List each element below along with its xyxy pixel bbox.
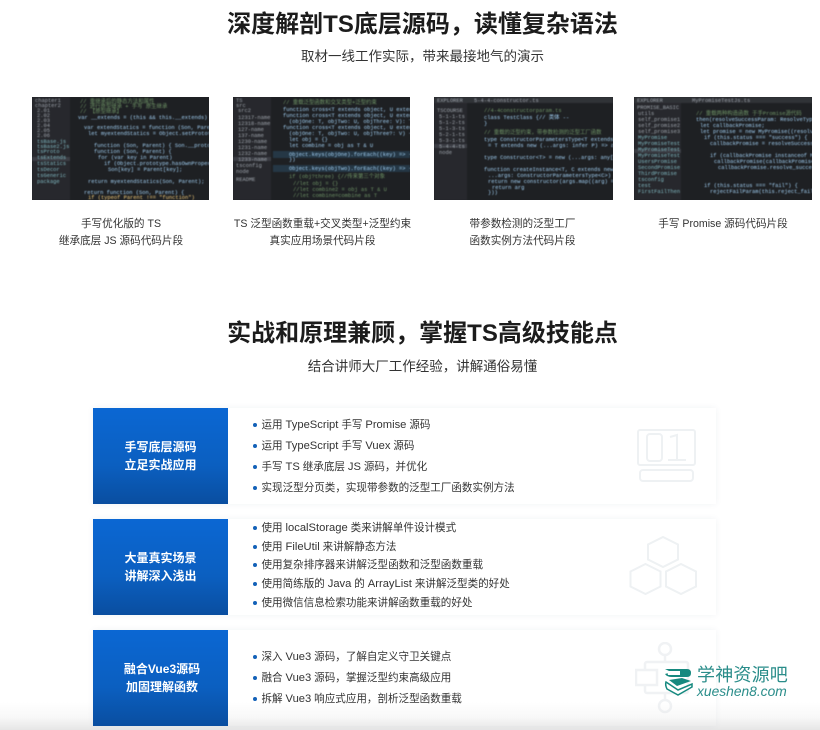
code screenshot 2: TS overload: (objOne: T, objTwo: U, objThree?: V) {	[289, 131, 410, 137]
bullet list: 深入 Vue3 源码，了解自定义守卫关键点	[262, 651, 451, 663]
code screenshot 1: JS extends source: package	[37, 179, 60, 185]
code screenshot 4: Promise source: // 重载两种构造函数 于手Promise源代码	[696, 109, 802, 117]
code screenshot 4: Promise source: tsconfig	[638, 177, 664, 183]
code screenshot 1: JS extends source: tsBase2.js	[37, 144, 69, 150]
code screenshot 2: TS overload: README	[236, 177, 255, 183]
panel: real scenarios	[93, 519, 716, 615]
code screenshot 3: generic factory: 5-1-1-ts	[439, 114, 465, 120]
bullet list: 运用 TypeScript 手写 Promise 源码	[262, 419, 430, 431]
code screenshot 2: TS overload: if (obj?three) {//传来第三个对象	[289, 172, 386, 180]
panel label: 手写底层源码	[124, 440, 196, 454]
code screenshot 4: Promise source: self_promise3	[638, 129, 680, 135]
bullet list: 使用 localStorage 类来讲解单件设计模式	[262, 522, 456, 534]
code screenshot 2: TS overload: src2	[238, 108, 251, 114]
code screenshot 4: Promise source: MyPromiseTest	[638, 153, 680, 159]
caption 2: 真实应用场景代码片段	[270, 234, 375, 246]
code screenshot 1: JS extends source: // 重继承后的静态方法和属性	[80, 97, 155, 105]
code screenshot 4: Promise source: MyPromiseTest	[638, 147, 680, 153]
code screenshot 1: JS extends source: chapter1	[35, 98, 61, 104]
code screenshot 1: JS extends source: function (Son, Parent) {	[94, 149, 172, 155]
code screenshot 1: JS extends source: 2.02	[37, 113, 50, 119]
bullet list: 实现泛型分页类，实现带参数的泛型工厂函数实例方法	[262, 482, 515, 494]
panel label	[93, 408, 228, 504]
bullet list: 运用 TypeScript 手写 Vuex 源码	[262, 440, 414, 452]
code screenshot 2: TS overload: 1230-name	[238, 139, 267, 145]
subtitle: section two: 结合讲师大厂工作经验，讲解通俗易懂	[308, 359, 537, 374]
subtitle: section one: 取材一线工作实际，带来最接地气的演示	[301, 49, 544, 64]
code screenshot 1: JS extends source: tsDecor	[37, 167, 60, 173]
code screenshot 2: TS overload: node	[236, 169, 249, 175]
code screenshot 1: JS extends source: 2.03	[37, 118, 50, 124]
code screenshot 3: generic factory: class TestClass {// 类体 --	[484, 113, 569, 121]
panel label: 立足实战应用	[124, 458, 196, 472]
bullet list: 手写 TS 继承底层 JS 源码，并优化	[262, 461, 427, 473]
code screenshot 2: TS overload: 127-name	[238, 127, 264, 133]
code screenshot 2: TS overload: 1233-name	[238, 157, 267, 163]
code screenshot 3: generic factory	[434, 97, 613, 200]
panel: handwritten source	[93, 408, 716, 504]
code screenshot 1: JS extends source: tsStatics	[37, 161, 66, 167]
bullet list	[253, 418, 515, 494]
code screenshot 4: Promise source: MyPromise	[638, 135, 667, 141]
panel label: 讲解深入浅出	[124, 569, 196, 583]
icon: books	[664, 669, 693, 696]
code screenshot 2: TS overload: 12317-name	[238, 115, 270, 121]
panel label: 大量真实场景	[124, 550, 196, 564]
code screenshot 2: TS overload: //let combine=combine as T	[293, 193, 378, 199]
code screenshot 4: Promise source	[634, 97, 812, 200]
code screenshot 3: generic factory: 5-3-1-ts	[439, 138, 465, 144]
caption 3: 函数实例方法代码片段	[470, 234, 575, 246]
code screenshot 4: Promise source: if (this.status === "fail") {	[704, 183, 798, 189]
code screenshot 2: TS overload: let combine = obj as T & U	[289, 143, 373, 149]
code screenshot 1: JS extends source: chapter2	[35, 103, 61, 109]
code screenshot 1: JS extends source: // 进行原型继承 + 手写 原生继承	[80, 102, 168, 110]
code screenshot 2: TS overload: Object.keys(objOne).forEach((key) => {	[289, 152, 410, 158]
caption 4: 手写 Promise 源码代码片段	[658, 218, 788, 230]
bullet list: 使用 FileUtil 来讲解静态方法	[262, 541, 396, 553]
code screenshot 3: generic factory: return arg	[492, 185, 524, 191]
panel: Vue3 source	[93, 630, 716, 726]
code screenshot 4: Promise source: SecondPromise	[638, 165, 680, 171]
code screenshot 2: TS overload: TS	[236, 98, 242, 104]
caption 2	[234, 218, 411, 246]
brand name: 学神资源吧	[697, 665, 788, 685]
bullet list: 使用微信信息检索功能来讲解函数重载的好处	[262, 597, 472, 609]
icon: 01 monitor	[637, 429, 696, 482]
code screenshot 4: Promise source: test	[638, 183, 651, 189]
code screenshot 1: JS extends source: tsGeneric	[37, 173, 66, 179]
code screenshot 1: JS extends source: tsBase.js	[37, 139, 66, 145]
bullet list: 使用简练版的 Java 的 ArrayList 来讲解泛型类的好处	[262, 578, 510, 590]
code screenshot 4: Promise source: UsersPromise	[638, 159, 677, 165]
code screenshot 2: TS overload: src	[236, 103, 246, 109]
panel label: 加固理解函数	[126, 680, 198, 694]
code screenshot 3: generic factory: }	[484, 121, 487, 127]
code screenshot 4: Promise source: FirstFailThen	[638, 189, 680, 195]
code screenshot 1: JS extends source: 2.04	[37, 123, 50, 129]
code screenshot 3: generic factory: 5-1-2-ts	[439, 120, 465, 126]
bullet list: 融合 Vue3 源码，掌握泛型约束高级应用	[262, 672, 451, 684]
code screenshot 1: JS extends source: tsProto	[37, 149, 60, 155]
code screenshot 3: generic factory: // 重载的泛型约束，带参数检测的泛型工厂函数	[484, 128, 602, 136]
code screenshot 1: JS extends source: 2.06	[37, 133, 50, 139]
icon: hexagons	[630, 536, 697, 595]
caption 3	[470, 218, 575, 246]
bullet list	[253, 650, 462, 705]
code screenshot 2: TS overload: 12318-name	[238, 121, 270, 127]
panel label: 融合Vue3源码	[124, 662, 200, 676]
code screenshot 4: Promise source: MyPromiseTest	[638, 141, 680, 147]
code screenshot 3: generic factory: EXPLORER	[437, 98, 464, 104]
code screenshot 2: TS overload: // 重载泛型函数和交叉类型+泛型约束	[283, 98, 377, 106]
code screenshot 1: JS extends source: tsExtends	[37, 155, 66, 161]
code screenshot 2: TS overload: 137-name	[238, 133, 264, 139]
code screenshot 3: generic factory: 5-1-3-ts	[439, 126, 465, 132]
code screenshot 1: JS extends source: 2.01	[37, 108, 50, 114]
caption 1: 手写优化版的 TS	[81, 218, 161, 230]
code screenshot 1: JS extends source: // 【原型继承】	[80, 107, 122, 115]
caption 1	[59, 218, 183, 246]
code screenshot 2: TS overload: //let obj = {}	[293, 181, 338, 187]
caption 3: 带参数检测的泛型工厂	[470, 218, 575, 230]
code screenshot 4: Promise source: PROMISE_BASIC	[637, 105, 679, 111]
bottom fade	[0, 702, 820, 730]
code screenshot 2: TS overload: })	[289, 157, 295, 163]
title: section two heading: 实战和原理兼顾，掌握TS高级技能点	[227, 320, 618, 347]
code screenshot 2: TS overload: let obj = {}	[289, 137, 328, 143]
code screenshot 2: TS overload	[233, 97, 410, 200]
watermark logo	[664, 665, 788, 699]
code screenshot 2: TS overload: 1232-name	[238, 151, 267, 157]
code screenshot 4: Promise source: if (this.status === "success") {	[704, 135, 808, 141]
bullet list	[253, 522, 510, 609]
code screenshot 3: generic factory: }))	[488, 190, 498, 196]
code screenshot 1: JS extends source: for (var key in Parent)	[98, 155, 172, 161]
code screenshot 1: JS extends source: return myextendStatics(Son, Parent);	[88, 179, 204, 185]
code screenshot 4: Promise source: let callbackPromise;	[700, 123, 765, 129]
code screenshot 3: generic factory: 5-2-1-ts	[439, 132, 465, 138]
title: section one heading: 深度解剖TS底层源码，读懂复杂语法	[227, 11, 618, 38]
code screenshot 4: Promise source: self_promise2	[638, 123, 680, 129]
code screenshot 3: generic factory: //4-4constructorparam.ts	[484, 108, 562, 114]
code screenshot 3: generic factory: 5-4-4-ts	[439, 144, 465, 150]
code screenshot 3: generic factory: TSCOURSE	[437, 108, 463, 114]
code screenshot 3: generic factory: node	[439, 150, 452, 156]
icon: flow chart	[635, 642, 689, 713]
code screenshot 4: Promise source: MyPromiseTestJs.ts	[692, 98, 750, 104]
panel label	[93, 630, 228, 726]
code screenshot 2: TS overload: //let combine2 = obj as T & U	[293, 187, 387, 193]
code screenshot 3: generic factory: 5-4-4-constructor.ts	[474, 98, 539, 104]
code screenshot 2: TS overload: 1231-name	[238, 145, 267, 151]
code screenshot 4: Promise source: ThirdPromise	[638, 171, 677, 177]
bullet list: 使用复杂排序器来讲解泛型函数和泛型函数重载	[262, 559, 483, 571]
code screenshot 4: Promise source: EXPLORER	[637, 98, 664, 104]
code screenshot 4: Promise source: utils	[638, 111, 654, 117]
code screenshot 1: JS extends source: 2.05	[37, 128, 50, 134]
code screenshot 2: TS overload: Object.keys(objTwo).forEach((key) => {	[289, 166, 410, 172]
code screenshot 2: TS overload: tsconfig	[236, 163, 262, 169]
code screenshot 1: JS extends source: Son[key] = Parent[key];	[108, 167, 182, 173]
brand url: xueshen8.com	[697, 684, 787, 699]
panel label	[93, 519, 228, 615]
caption 1: 继承底层 JS 源码代码片段	[59, 234, 183, 246]
code screenshot 4: Promise source: self_promise1	[638, 117, 680, 123]
bullet list: 拆解 Vue3 响应式应用，剖析泛型函数重载	[262, 693, 462, 705]
code screenshot 1: JS extends source	[32, 97, 209, 200]
code screenshot 1: JS extends source: return function (Son, Parent) {	[84, 190, 184, 196]
caption 2: TS 泛型函数重载+交叉类型+泛型约束	[234, 218, 411, 230]
